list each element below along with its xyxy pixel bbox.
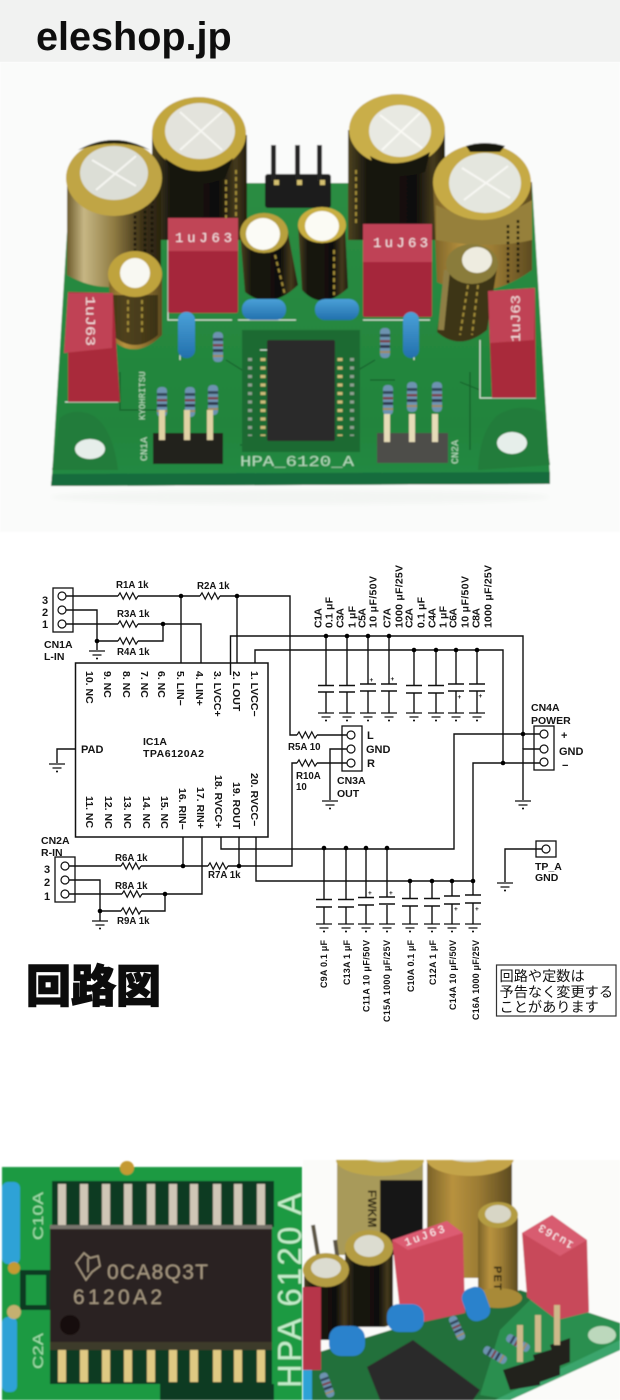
site name: eleshop.jp xyxy=(36,15,232,59)
blue capacitors xyxy=(2,1182,20,1264)
film capacitor right: 1uJ63 xyxy=(509,295,525,342)
top capacitor bank: 1 μF xyxy=(438,605,450,628)
IC1A block: 15. NC xyxy=(158,796,170,829)
top capacitor bank: 1000 μF/25V xyxy=(482,565,494,628)
left channel input wiring: R4A 1k xyxy=(117,647,150,658)
small capacitors centre xyxy=(240,207,348,301)
IC1A block: 5. LIN− xyxy=(174,671,186,706)
connector CN3A output: CN3A xyxy=(337,775,366,787)
IC1A block: 8. NC xyxy=(120,671,132,698)
IC1A block: 7. NC xyxy=(138,671,150,698)
connector CN4A power: GND xyxy=(559,746,584,758)
IC1A block: IC1A xyxy=(143,736,167,748)
top capacitor bank: C3A xyxy=(334,608,346,628)
connector CN4A power xyxy=(501,702,584,810)
IC1A block: 17. RIN+ xyxy=(194,787,206,829)
bottom pin headers xyxy=(153,410,448,464)
top capacitor bank: + xyxy=(478,693,482,700)
electrolytic capacitor back right xyxy=(348,94,445,240)
connector CN2A and right channel input wiring: R9A 1k xyxy=(117,916,150,927)
IC1A block: 19. ROUT xyxy=(230,782,242,830)
connector CN3A output: R5A 10 xyxy=(288,742,320,753)
photo: amplifier board top view xyxy=(0,62,620,532)
top capacitor bank: 0.1 μF xyxy=(416,596,428,628)
electrolytic capacitor back left xyxy=(152,97,247,240)
circuit board xyxy=(51,183,550,486)
connector CN2A and right channel input wiring: 1 xyxy=(44,891,50,903)
connector CN4A power: CN4A xyxy=(531,702,560,714)
resistors xyxy=(157,328,442,417)
bottom capacitor bank: + xyxy=(475,906,479,913)
connector CN2A and right channel input wiring: 2 xyxy=(44,877,50,889)
left channel input wiring xyxy=(66,580,523,763)
bottom capacitor bank: + xyxy=(389,890,393,897)
connector CN2A and right channel input wiring: R-IN xyxy=(41,847,63,859)
bottom capacitor bank: C11A 10 μF/50V xyxy=(362,940,372,1012)
IC1A block: 10. NC xyxy=(83,671,95,704)
connector CN1A: 3 xyxy=(42,595,48,607)
top capacitor bank: 1000 μF/25V xyxy=(394,565,406,628)
IC1A block: 11. NC xyxy=(83,796,95,829)
top capacitor bank: C4A xyxy=(426,608,438,628)
top capacitor bank: 10 μF/50V xyxy=(460,576,472,628)
note box: 予告なく変更する xyxy=(500,985,613,1001)
film capacitors xyxy=(302,1215,589,1370)
IC1A block: 9. NC xyxy=(101,671,113,698)
test point TP_A: TP_A xyxy=(535,861,562,873)
top capacitor bank: + xyxy=(458,694,462,701)
large gold capacitor right xyxy=(433,143,532,291)
note box: ことがあります xyxy=(500,1000,599,1016)
connector CN2A and right channel input wiring: 3 xyxy=(44,864,50,876)
silkscreen labels xyxy=(30,1192,47,1369)
bottom capacitor bank: + xyxy=(454,906,458,913)
top capacitor bank: C2A xyxy=(404,608,416,628)
IC1A block: 20. RVCC− xyxy=(248,773,260,826)
pins back left xyxy=(313,1225,338,1262)
connector CN3A output: GND xyxy=(366,744,390,756)
top capacitor bank: C1A xyxy=(312,608,324,628)
connector CN3A output xyxy=(288,726,390,810)
bottom capacitor bank xyxy=(316,846,481,1022)
top pin header xyxy=(265,145,331,208)
IC1A block: TPA6120A2 xyxy=(143,748,204,760)
top capacitor bank: 10 μF/50V xyxy=(368,576,380,628)
film capacitor centre left xyxy=(168,218,238,313)
test point TP_A: GND xyxy=(535,872,559,884)
connector CN1A: 1 xyxy=(42,619,48,631)
IC1A block: PAD xyxy=(81,744,103,756)
circuit board: KYOHRITSU xyxy=(138,371,148,420)
top capacitor bank: C8A xyxy=(470,608,482,628)
circuit board xyxy=(303,1290,620,1400)
small capacitors xyxy=(303,1230,393,1340)
connector CN2A and right channel input wiring xyxy=(41,734,540,930)
top capacitor bank xyxy=(312,565,494,722)
bottom capacitor bank: C10A 0.1 μF xyxy=(406,940,416,992)
chip xyxy=(367,1340,480,1400)
blue capacitors xyxy=(302,1284,493,1400)
PET capacitor xyxy=(474,1202,522,1308)
IC1A block: 6. NC xyxy=(155,671,167,698)
circuit board: HPA_6120_A xyxy=(240,454,354,471)
film capacitor centre right xyxy=(363,224,432,317)
top capacitor bank: 0.1 μF xyxy=(324,596,336,628)
film capacitors: 1uJ63 xyxy=(403,1224,447,1250)
connector CN3A output: R xyxy=(367,758,375,770)
connector CN2A and right channel input wiring: R7A 1k xyxy=(208,870,241,881)
small capacitor right xyxy=(437,244,498,342)
large capacitors: FWKM xyxy=(365,1190,379,1227)
chip body: 6120A2 xyxy=(73,1286,162,1309)
connector CN2A and right channel input wiring: CN2A xyxy=(41,835,70,847)
connector CN4A power: + xyxy=(561,730,567,742)
film capacitors: 1uJ63 xyxy=(537,1221,576,1250)
bottom capacitor bank: C12A 1 μF xyxy=(428,940,438,985)
connector CN3A output: R10A xyxy=(296,771,321,782)
silkscreen labels: C10A xyxy=(30,1192,47,1240)
connector CN2A and right channel input wiring: R6A 1k xyxy=(115,853,148,864)
photo: chip close-up xyxy=(2,1161,308,1400)
note box xyxy=(496,965,616,1016)
IC chip with pads xyxy=(250,340,352,441)
IC1A block: 18. RVCC+ xyxy=(212,775,224,828)
film capacitor centre left: 1uJ63 xyxy=(175,231,232,247)
IC1A block: 14. NC xyxy=(140,796,152,829)
resistors xyxy=(319,1315,531,1398)
chip body xyxy=(50,1225,272,1350)
IC1A block: 2. LOUT xyxy=(230,671,242,712)
photo: board angled close-up xyxy=(302,1140,620,1400)
bottom capacitor bank: + xyxy=(368,890,372,897)
left channel input wiring: R3A 1k xyxy=(117,609,150,620)
top capacitor bank: C7A xyxy=(382,608,394,628)
film capacitor right xyxy=(488,288,536,398)
IC1A block: 12. NC xyxy=(102,796,114,829)
photo: chip close-up: HPA 6120 A xyxy=(271,1193,308,1388)
top capacitor bank: C5A xyxy=(356,608,368,628)
blue ceramic capacitors xyxy=(178,299,419,358)
circuit board: CN1A xyxy=(140,437,151,461)
connector CN1A: 2 xyxy=(42,607,48,619)
top capacitor bank: + xyxy=(390,676,394,683)
connector CN1A xyxy=(42,588,73,663)
top capacitor bank: + xyxy=(370,677,374,684)
circuit board: CN2A xyxy=(451,440,462,464)
chip leads xyxy=(58,1184,265,1226)
IC1A block: 1. LVCC− xyxy=(248,671,260,717)
large capacitors xyxy=(335,1159,514,1279)
silkscreen labels: C2A xyxy=(30,1333,47,1369)
IC1A block: 13. NC xyxy=(121,796,133,829)
bottom capacitor bank: C13A 1 μF xyxy=(342,940,352,985)
test point TP_A xyxy=(497,841,562,892)
PET capacitor: PET xyxy=(491,1266,503,1290)
connector CN2A and right channel input wiring: R8A 1k xyxy=(115,881,148,892)
connector CN3A output: L xyxy=(367,730,374,742)
connector CN4A power: − xyxy=(562,760,568,772)
connector CN3A output: 10 xyxy=(296,782,307,793)
IC1A block: 4. LIN+ xyxy=(193,671,205,706)
IC1A block: 16. RIN− xyxy=(176,788,188,830)
note box: 回路や定数は xyxy=(500,969,585,985)
IC1A block: 3. LVCC+ xyxy=(211,671,223,717)
dark trace areas xyxy=(20,1181,274,1400)
bottom capacitor bank: C14A 10 μF/50V xyxy=(448,940,458,1010)
top capacitor bank: C6A xyxy=(448,608,460,628)
film capacitor left: 1uJ63 xyxy=(81,296,97,346)
left channel input wiring: R1A 1k xyxy=(116,580,149,591)
large gold capacitor left xyxy=(66,140,162,287)
chip body: 0CA8Q3T xyxy=(107,1261,208,1284)
connector CN1A: L-IN xyxy=(44,651,64,663)
bottom capacitor bank: C15A 1000 μF/25V xyxy=(382,940,392,1022)
bottom capacitor bank: C16A 1000 μF/25V xyxy=(471,940,481,1020)
connector CN1A: CN1A xyxy=(44,639,73,651)
connector CN3A output: OUT xyxy=(337,788,360,800)
bottom capacitor bank: C9A 0.1 μF xyxy=(319,940,329,988)
small capacitor left xyxy=(108,251,162,349)
circuit schematic xyxy=(41,565,584,1022)
top capacitor bank: 1 μF xyxy=(346,605,358,628)
connector CN4A power: POWER xyxy=(531,715,571,727)
IC1A block xyxy=(49,663,268,837)
film capacitor left xyxy=(64,292,120,402)
left channel input wiring: R2A 1k xyxy=(197,581,230,592)
pin header xyxy=(503,1305,570,1390)
heading: circuit diagram: 回路図 xyxy=(26,961,161,1012)
header band xyxy=(0,0,620,62)
film capacitor centre right: 1uJ63 xyxy=(373,236,428,252)
